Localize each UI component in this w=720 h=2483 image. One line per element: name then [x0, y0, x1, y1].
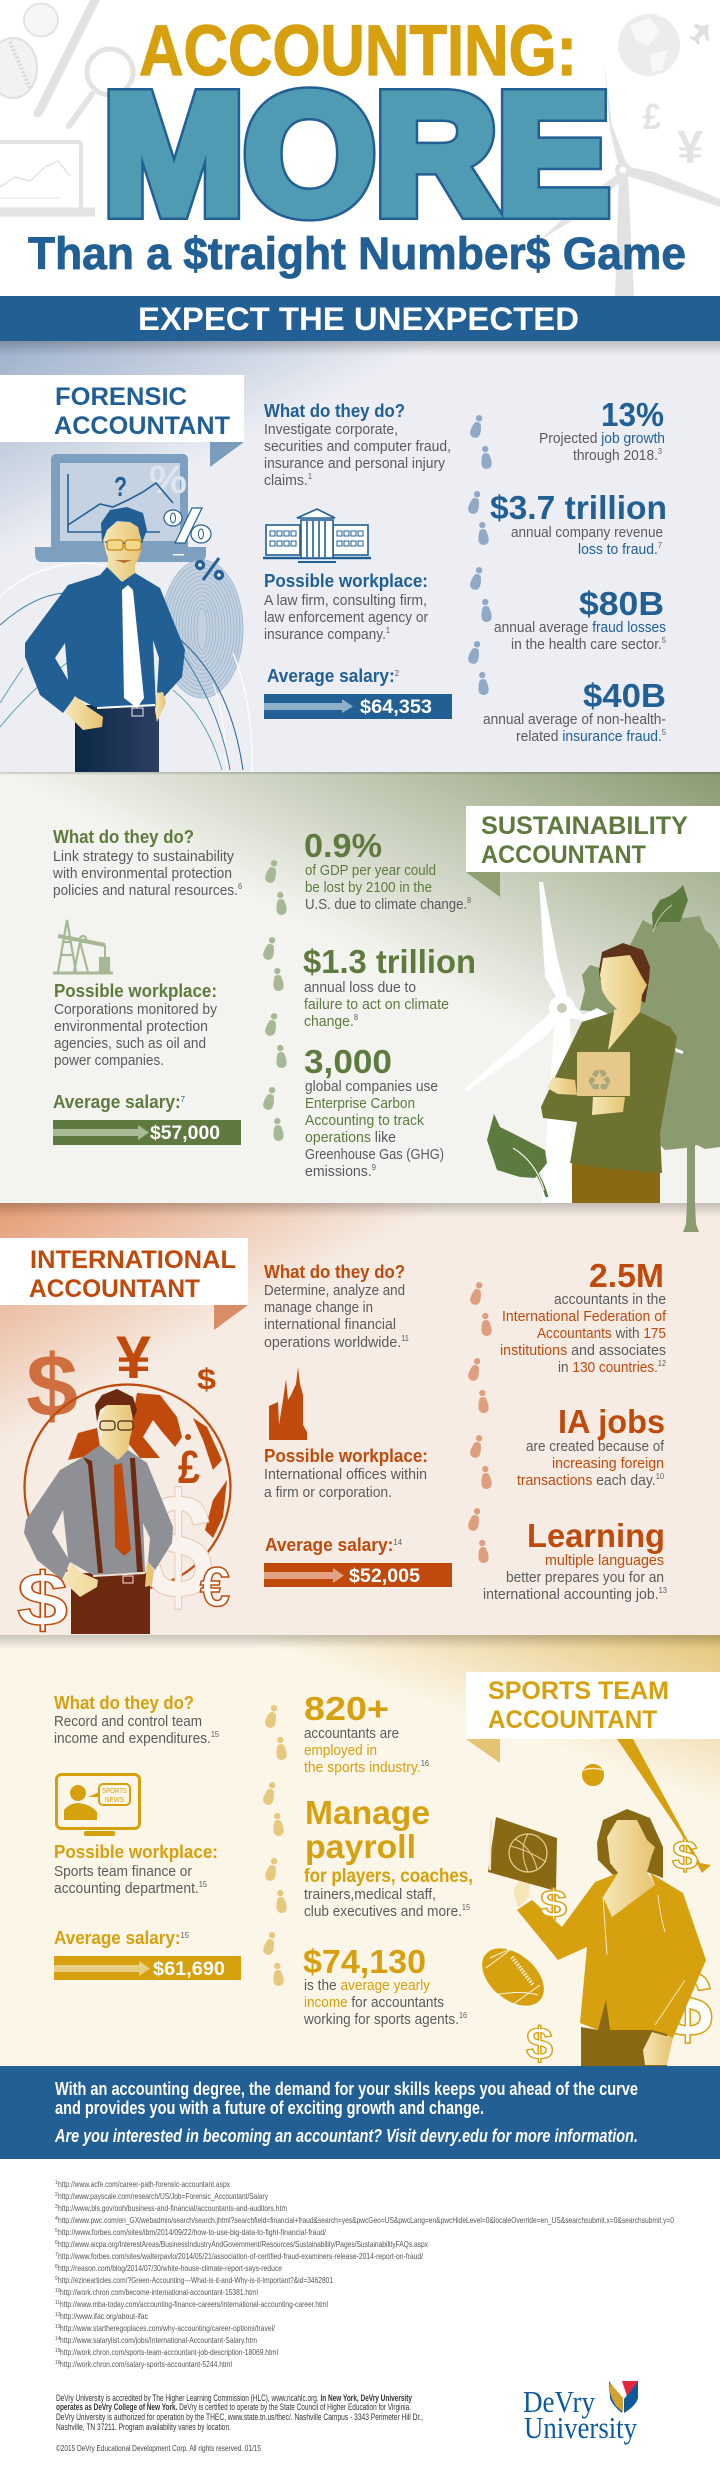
accreditation text: DeVry University is authorized for operation by the THEC, www.state.tn.us/thec/. Nashville Campus - 3343 Perimeter Hill Dr., [56, 2412, 423, 2422]
salary bar: Average salary: [265, 1535, 398, 1555]
stat: 3,000 companies: Enterprise Carbon [305, 1095, 415, 1112]
illustration: sports team accountant with book and ball icons [471, 1739, 713, 2069]
text: what do they do: operations worldwide. [264, 1334, 409, 1351]
text: what do they do: 1 [308, 472, 313, 481]
stat: $3.7 trillion: loss to fraud. [578, 541, 664, 558]
references list: 3 [55, 2204, 58, 2210]
stat: $80B: 5 [662, 636, 667, 645]
stat: 820+ accountants: employed in [304, 1742, 377, 1759]
text: what do they do [264, 1262, 410, 1351]
icon: faded magnifying glass [69, 49, 133, 126]
stat: 0.9% of GDP: 8 [467, 896, 471, 905]
belt and hands [65, 692, 166, 730]
references list: http://www.payscale.com/research/US/Job=Forensic_Accountant/Salary [58, 2191, 269, 2201]
stat: manage payroll: Manage [305, 1794, 430, 1831]
stat: $74,130 [303, 1943, 467, 2028]
salary bar: 7 [181, 1095, 186, 1104]
stat: $3.7 trillion [490, 489, 667, 558]
icons: dollar signs: $ [540, 1883, 567, 1926]
stat: IA jobs: 10 [656, 1472, 665, 1481]
stat: 2.5M accountants: International Federation of [502, 1308, 667, 1325]
stat: learning languages: better prepares you for an [506, 1569, 664, 1586]
face and neck [603, 1820, 655, 1917]
stat: $74,130: $74,130 [303, 1943, 426, 1980]
text: what do they do: Investigate corporate, [264, 421, 398, 438]
stat: 0.9% of GDP [304, 827, 471, 913]
text: what do they do: What do they do? [53, 827, 194, 847]
panel: sustainability accountant [0, 772, 720, 1232]
text: possible workplace: Possible workplace: [264, 1446, 428, 1466]
stat: 3,000 companies: 3,000 [304, 1043, 392, 1080]
icons: dollar signs: $ [672, 1832, 698, 1878]
references list: http://ezinearticles.com/?Green-Accounting---What-is-it-and-Why-is-it-Important?&id=3462801 [58, 2275, 333, 2285]
text: possible workplace: power companies. [54, 1052, 164, 1069]
icon: shield [609, 2381, 638, 2413]
icon: fingerprint [161, 560, 243, 698]
stat: manage payroll [304, 1794, 473, 1920]
salary bar: Average salary: [267, 666, 400, 686]
icon: faded baseball [24, 4, 58, 36]
band: expect the unexpected [0, 296, 720, 341]
icon: book with basketball [488, 1817, 557, 1891]
hair [599, 943, 650, 1003]
stat: $1.3 trillion: failure to act on climate [304, 996, 449, 1013]
text: what do they do: claims. [264, 472, 311, 489]
heading banner: sports team accountant: ACCOUNTANT [488, 1706, 657, 1734]
salary bar: $52,005 [349, 1566, 420, 1587]
stat: 3,000 companies [304, 1043, 444, 1180]
text: what do they do: Record and control team [54, 1713, 202, 1730]
stat: $1.3 trillion: change. [304, 1013, 357, 1030]
icon: faded globe [618, 14, 680, 76]
stat: manage payroll: for players, coaches, [304, 1866, 473, 1887]
stat: manage payroll: payroll [305, 1828, 416, 1865]
call to action band [0, 2066, 720, 2159]
heading banner: sustainability accountant: SUSTAINABILITY [481, 812, 688, 840]
salary bar [264, 666, 452, 719]
stat: 0.9% of GDP: U.S. due to climate change. [305, 896, 489, 913]
pants [75, 705, 159, 772]
references list: 2 [55, 2192, 58, 2198]
icon: city skyline [269, 1367, 307, 1440]
jacket [517, 1873, 706, 2038]
heading banner: forensic accountant [0, 375, 244, 467]
stat: $74,130: working for sports agents. [304, 2011, 476, 2028]
footprints [467, 1281, 492, 1563]
tie [122, 585, 144, 708]
title: More: MORE [104, 60, 610, 250]
face and neck [99, 1405, 133, 1460]
decorative arcs [0, 563, 252, 772]
stat: $1.3 trillion: 8 [354, 1013, 359, 1022]
stat: 13% job growth: 13% [601, 396, 664, 433]
text: what do they do [54, 1693, 219, 1747]
references list: 15 [55, 2348, 61, 2354]
text: what do they do [264, 401, 451, 489]
text: what do they do: policies and natural resources. [53, 882, 256, 899]
salary bar: Average salary: [53, 1092, 186, 1112]
heading banner: international accountant [0, 1238, 248, 1330]
icon: euro: € [200, 1555, 230, 1618]
text: what do they do: What do they do? [264, 401, 405, 421]
stat: $40B: $40B [583, 677, 666, 714]
icon: faded pound sign: £ [643, 96, 661, 137]
references list: http://www.salarylist.com/jobs/International-Accountant-Salary.htm [60, 2335, 257, 2345]
stat: learning languages [483, 1517, 668, 1603]
heading banner: forensic accountant: FORENSIC [55, 383, 187, 411]
stat: 2.5M accountants: 12 [658, 1359, 666, 1368]
references list: http://work.chron.com/become-international-accountant-15381.html [60, 2287, 258, 2297]
hands [62, 1562, 154, 1597]
text: possible workplace: Possible workplace: [54, 1842, 218, 1862]
icon: large dollar: $ [26, 1336, 78, 1435]
heading banner: international accountant: INTERNATIONAL [30, 1246, 236, 1274]
text: possible workplace: 15 [199, 1880, 208, 1889]
references list: 13 [55, 2324, 61, 2330]
text: possible workplace [264, 1446, 428, 1501]
folder and hands [547, 1052, 630, 1115]
references list: 4 [55, 2216, 58, 2222]
icon: sports news tv: NEWS [105, 1797, 124, 1804]
stat: learning languages: international accounting job. [483, 1586, 670, 1603]
icon: faded wind turbine [540, 60, 720, 296]
band: expect the unexpected: EXPECT THE UNEXPECTED [138, 301, 579, 337]
icon: outline dollar: $ [17, 1558, 68, 1643]
text: possible workplace: environmental protection [54, 1018, 208, 1035]
tree silhouette [580, 915, 720, 1232]
stat: IA jobs: are created because of [526, 1438, 665, 1455]
stat: $40B [483, 677, 667, 745]
stat: 3,000 companies: operations like [305, 1129, 396, 1146]
salary bar: $57,000 [150, 1123, 220, 1144]
stat: $74,130: income for accountants [304, 1994, 444, 2011]
icon: faded baseball bat [33, 0, 100, 117]
icons: dollar signs: $ [526, 2018, 553, 2069]
text: what do they do: What do they do? [54, 1693, 194, 1713]
references list: http://www.bls.gov/ooh/business-and-financial/accountants-and-auditors.htm [58, 2203, 287, 2213]
illustration: forensic accountant with laptop and fingerprint [0, 454, 252, 772]
footprints [262, 859, 287, 1141]
heading banner: sustainability accountant [466, 806, 720, 897]
heading banner: international accountant: ACCOUNTANT [29, 1275, 200, 1303]
text: what do they do [52, 827, 242, 899]
hair [95, 1389, 137, 1422]
stat: 3,000 companies: emissions. [305, 1163, 376, 1180]
text: what do they do: Determine, analyze and [264, 1282, 405, 1299]
salary bar: $61,690 [153, 1959, 225, 1980]
text: possible workplace: Possible workplace: [54, 981, 217, 1001]
title: More: MORE [104, 60, 610, 250]
icon: faded football [0, 38, 37, 98]
references list: 11 [55, 2300, 60, 2306]
stat: IA jobs [517, 1403, 665, 1489]
references list: http://www.mba-today.com/accounting-finance-careers/international-accounting-career.html [60, 2299, 328, 2309]
stat: $1.3 trillion: annual loss due to [304, 979, 416, 996]
icon: bat [617, 1739, 711, 1873]
accreditation text: ©2015 DeVry Educational Development Corp. All rights reserved. 01/15 [56, 2443, 261, 2453]
references list: http://reason.com/blog/2014/07/30/white-house-climate-report-says-reduce [58, 2263, 282, 2273]
stat: 0.9% of GDP: of GDP per year could [305, 862, 436, 879]
hair [101, 507, 147, 543]
icon: sports news tv [56, 1774, 140, 1836]
stat: $3.7 trillion: $3.7 trillion [490, 489, 667, 526]
stat: manage payroll: 15 [462, 1903, 470, 1912]
salary bar: 15 [181, 1931, 190, 1940]
illustration: international accountant with globe and currency [17, 1324, 230, 1643]
icon: faint big dollar: $ [143, 1462, 213, 1630]
icons: dollar signs [526, 1832, 698, 2069]
text: possible workplace: Corporations monitored by [54, 1001, 217, 1018]
stat: 3,000 companies: global companies use [305, 1078, 438, 1095]
icon: yen: ¥ [116, 1324, 152, 1391]
references list: 10 [55, 2288, 61, 2294]
illustration: tree, turbine, woman with folder [464, 882, 720, 1232]
icon: office building [263, 509, 371, 562]
stat: 13% job growth: through 2018. [573, 447, 666, 464]
stat: 0.9% of GDP: 0.9% [304, 827, 382, 864]
skirt and hand [581, 2000, 673, 2066]
stat: learning languages: 13 [659, 1586, 668, 1595]
face and neck [600, 955, 647, 1050]
stat: $1.3 trillion: $1.3 trillion [303, 943, 476, 980]
text: possible workplace [54, 1842, 218, 1897]
stat: $74,130: 16 [459, 2011, 467, 2020]
stat: 820+ accountants: accountants are [304, 1725, 399, 1742]
references list: http://www.startheregoplaces.com/why-accounting/career-options/travel/ [60, 2323, 276, 2333]
tree trunk overlap from previous panel [683, 1203, 699, 1232]
text: possible workplace: Possible workplace: [264, 571, 428, 591]
text: possible workplace: accounting department. [54, 1880, 211, 1897]
text: possible workplace: a firm or corporation. [264, 1484, 392, 1501]
salary bar: $64,353 [360, 697, 432, 718]
logo: DeVry University: DeVry [523, 2384, 595, 2419]
accreditation text: operates as DeVry College of New York. DeVry is certified to operate by the State Council of Higher Education for Virginia. [56, 2402, 411, 2412]
shirt [25, 567, 185, 713]
references list: http://www.forbes.com/sites/ibm/2014/09/22/how-to-use-big-data-to-fight-financial-fraud/ [58, 2227, 327, 2237]
salary bar: Average salary: [54, 1928, 187, 1948]
logo: DeVry University [523, 2381, 638, 2445]
references list: 9 [55, 2276, 58, 2282]
icon: laptop with chart: % [149, 458, 187, 502]
icon: large dollar behind: $ [662, 1951, 713, 2056]
references list: 8 [55, 2264, 58, 2270]
heading banner: sustainability accountant: ACCOUNTANT [481, 841, 646, 869]
glasses [105, 540, 143, 550]
icon: faded yen sign: ¥ [677, 121, 703, 173]
stat: 820+ accountants: the sports industry. [304, 1759, 430, 1776]
heading banner: sports team accountant [466, 1672, 720, 1763]
heading banner: sports team accountant: SPORTS TEAM [488, 1677, 669, 1705]
face and neck [104, 522, 142, 584]
text: possible workplace: International offices within [264, 1466, 427, 1483]
references list: 12 [55, 2312, 61, 2318]
heading banner: forensic accountant: ACCOUNTANT [54, 412, 230, 440]
stat: 2.5M accountants: in 130 countries. [558, 1359, 667, 1376]
stat: $40B: related insurance fraud. [516, 728, 670, 745]
panel: sports team accountant [0, 1635, 720, 2069]
text: possible workplace: agencies, such as oil and [54, 1035, 206, 1052]
stat: 2.5M accountants [500, 1257, 667, 1376]
stat: $74,130: is the average yearly [304, 1977, 430, 1994]
accreditation text: DeVry University is accredited by The Higher Learning Commission (HLC), www.ncahlc.org. In New York, DeVry University [56, 2393, 412, 2403]
references list: http://www.forbes.com/sites/walterpavlo/2014/05/21/association-of-certified-fraud-examiners-release-2014-report-on-fraud/ [58, 2251, 423, 2261]
stat: 820+ accountants [304, 1690, 430, 1776]
text: what do they do: international financial [264, 1316, 396, 1333]
globe [24, 1384, 230, 1590]
stat: $3.7 trillion: 7 [658, 541, 663, 550]
icon: oil pump jack [53, 920, 113, 973]
references list: 7 [55, 2252, 58, 2258]
references list: 6 [55, 2240, 58, 2246]
icon: small dollar: $ [197, 1364, 216, 1396]
text: what do they do: 11 [401, 1334, 410, 1343]
stat: $40B: annual average of non-health- [483, 711, 666, 728]
references list: http://work.chron.com/sports-team-accountant-job-description-18069.html [60, 2347, 278, 2357]
stat: 820+ accountants: 16 [421, 1759, 430, 1768]
stat: manage payroll: club executives and more. [304, 1903, 478, 1920]
salary bar [53, 1092, 241, 1145]
title: Accounting: ACCOUNTING: [139, 12, 577, 91]
references list: http://www.ifac.org/about-ifac [60, 2311, 149, 2321]
stat: 2.5M accountants: accountants in the [554, 1291, 666, 1308]
text: possible workplace [54, 981, 217, 1069]
logo: DeVry University: University [524, 2410, 637, 2445]
leaf top [652, 885, 688, 932]
icon: percent signs [164, 508, 222, 580]
text: possible workplace: law enforcement agency or [264, 609, 428, 626]
folder and hands: ♻ [586, 1064, 613, 1099]
stat: IA jobs: IA jobs [558, 1403, 665, 1440]
text: what do they do: income and expenditures. [54, 1730, 226, 1747]
salary bar [54, 1928, 241, 1980]
forearm and raised hand [513, 1870, 530, 1908]
suspenders, tie and belt [83, 1457, 145, 1583]
icon: laptop with chart [35, 454, 206, 562]
icon: laptop with chart: ? [114, 471, 127, 502]
panel: forensic accountant [0, 341, 720, 772]
accreditation text [56, 2393, 423, 2453]
footprints [262, 1704, 287, 1986]
call to action band: and provides you with a future of exciting growth and change. [55, 2098, 484, 2118]
stat: IA jobs: increasing foreign [552, 1455, 664, 1472]
references list: 14 [55, 2336, 61, 2342]
stat: $40B: 5 [662, 728, 667, 737]
text: possible workplace: A law firm, consulting firm, [264, 592, 427, 609]
stat: 3,000 companies: Accounting to track [305, 1112, 424, 1129]
stat: $3.7 trillion: annual company revenue [511, 524, 663, 541]
text: possible workplace: Sports team finance or [54, 1863, 192, 1880]
hair [597, 1809, 663, 1878]
stat: 13% job growth: 3 [658, 447, 663, 456]
pants [71, 1573, 150, 1634]
stat: 13% job growth: Projected job growth [539, 430, 665, 447]
wind turbine [464, 882, 683, 1203]
mouth [115, 560, 132, 563]
references list: http://work.chron.com/salary-sports-accountant-5244.html [60, 2359, 232, 2369]
stat: $80B: annual average fraud losses [494, 619, 666, 636]
glasses [100, 1421, 133, 1430]
title: subtitle: Than a $traight Number$ Game [28, 228, 686, 279]
references list: 16 [55, 2360, 61, 2366]
stat: $80B [494, 585, 667, 653]
text: what do they do: Link strategy to sustainability [53, 848, 234, 865]
text: possible workplace: 1 [386, 626, 391, 635]
leaf bottom [487, 1114, 547, 1197]
stat: $80B: $80B [579, 585, 664, 622]
stat: 3,000 companies: Greenhouse Gas (GHG) [305, 1146, 444, 1163]
icon: faded laptop [0, 142, 95, 212]
jacket [541, 1012, 677, 1173]
text: what do they do: with environmental protection [52, 865, 232, 882]
salary bar: 14 [393, 1538, 403, 1547]
text: what do they do: 6 [238, 882, 242, 891]
text: possible workplace: insurance company. [264, 626, 397, 643]
stat: 2.5M accountants: 2.5M [589, 1257, 664, 1294]
header: title area with background icons [0, 0, 720, 296]
panel: international accountant [0, 1203, 720, 1643]
text: what do they do: insurance and personal injury [264, 455, 445, 472]
stat: 2.5M accountants: institutions and associates [500, 1342, 666, 1359]
text: possible workplace [264, 571, 428, 643]
icon: faded plane [689, 24, 709, 45]
stat: 2.5M accountants: Accountants with 175 [537, 1325, 666, 1342]
references list [55, 2179, 674, 2369]
shirt [24, 1445, 173, 1580]
stat: $80B: in the health care sector. [511, 636, 674, 653]
jacket highlights [603, 1895, 685, 2025]
stat: manage payroll: trainers,medical staff, [304, 1886, 436, 1903]
stat: 3,000 companies: 9 [372, 1163, 377, 1172]
stat: learning languages: multiple languages [545, 1552, 664, 1569]
footprints [467, 414, 492, 695]
stat: $1.3 trillion [303, 943, 476, 1030]
text: what do they do: manage change in [264, 1299, 373, 1316]
stat: 0.9% of GDP: be lost by 2100 in the [305, 879, 432, 896]
references list: http://www.acfe.com/career-path-forensic-accountant.aspx [58, 2179, 231, 2189]
accreditation text: Nashville, TN 37211. Program availability varies by location. [56, 2422, 231, 2432]
stat: 13% job growth [539, 396, 665, 464]
stat: IA jobs: transactions each day. [517, 1472, 660, 1489]
salary bar [264, 1535, 452, 1587]
skirt [572, 1160, 660, 1203]
stat: 820+ accountants: 820+ [304, 1690, 389, 1727]
icon: football [471, 1936, 555, 2018]
icon: baseball [582, 1764, 604, 1786]
text: what do they do: securities and computer fraud, [264, 438, 451, 455]
salary bar: 2 [395, 669, 400, 678]
icon: sports news tv: SPORTS [102, 1788, 127, 1795]
text: what do they do: 15 [211, 1730, 219, 1739]
references list: http://www.aicpa.org/InterestAreas/BusinessIndustryAndGovernment/Resources/Sustainability/Pages/SustainabilityFAQs.aspx [58, 2239, 429, 2249]
references list: 5 [55, 2228, 58, 2234]
stat: learning languages: Learning [527, 1517, 665, 1554]
references list: 1 [55, 2180, 58, 2186]
icon: pound: £ [178, 1441, 200, 1493]
text: what do they do: What do they do? [264, 1262, 405, 1282]
